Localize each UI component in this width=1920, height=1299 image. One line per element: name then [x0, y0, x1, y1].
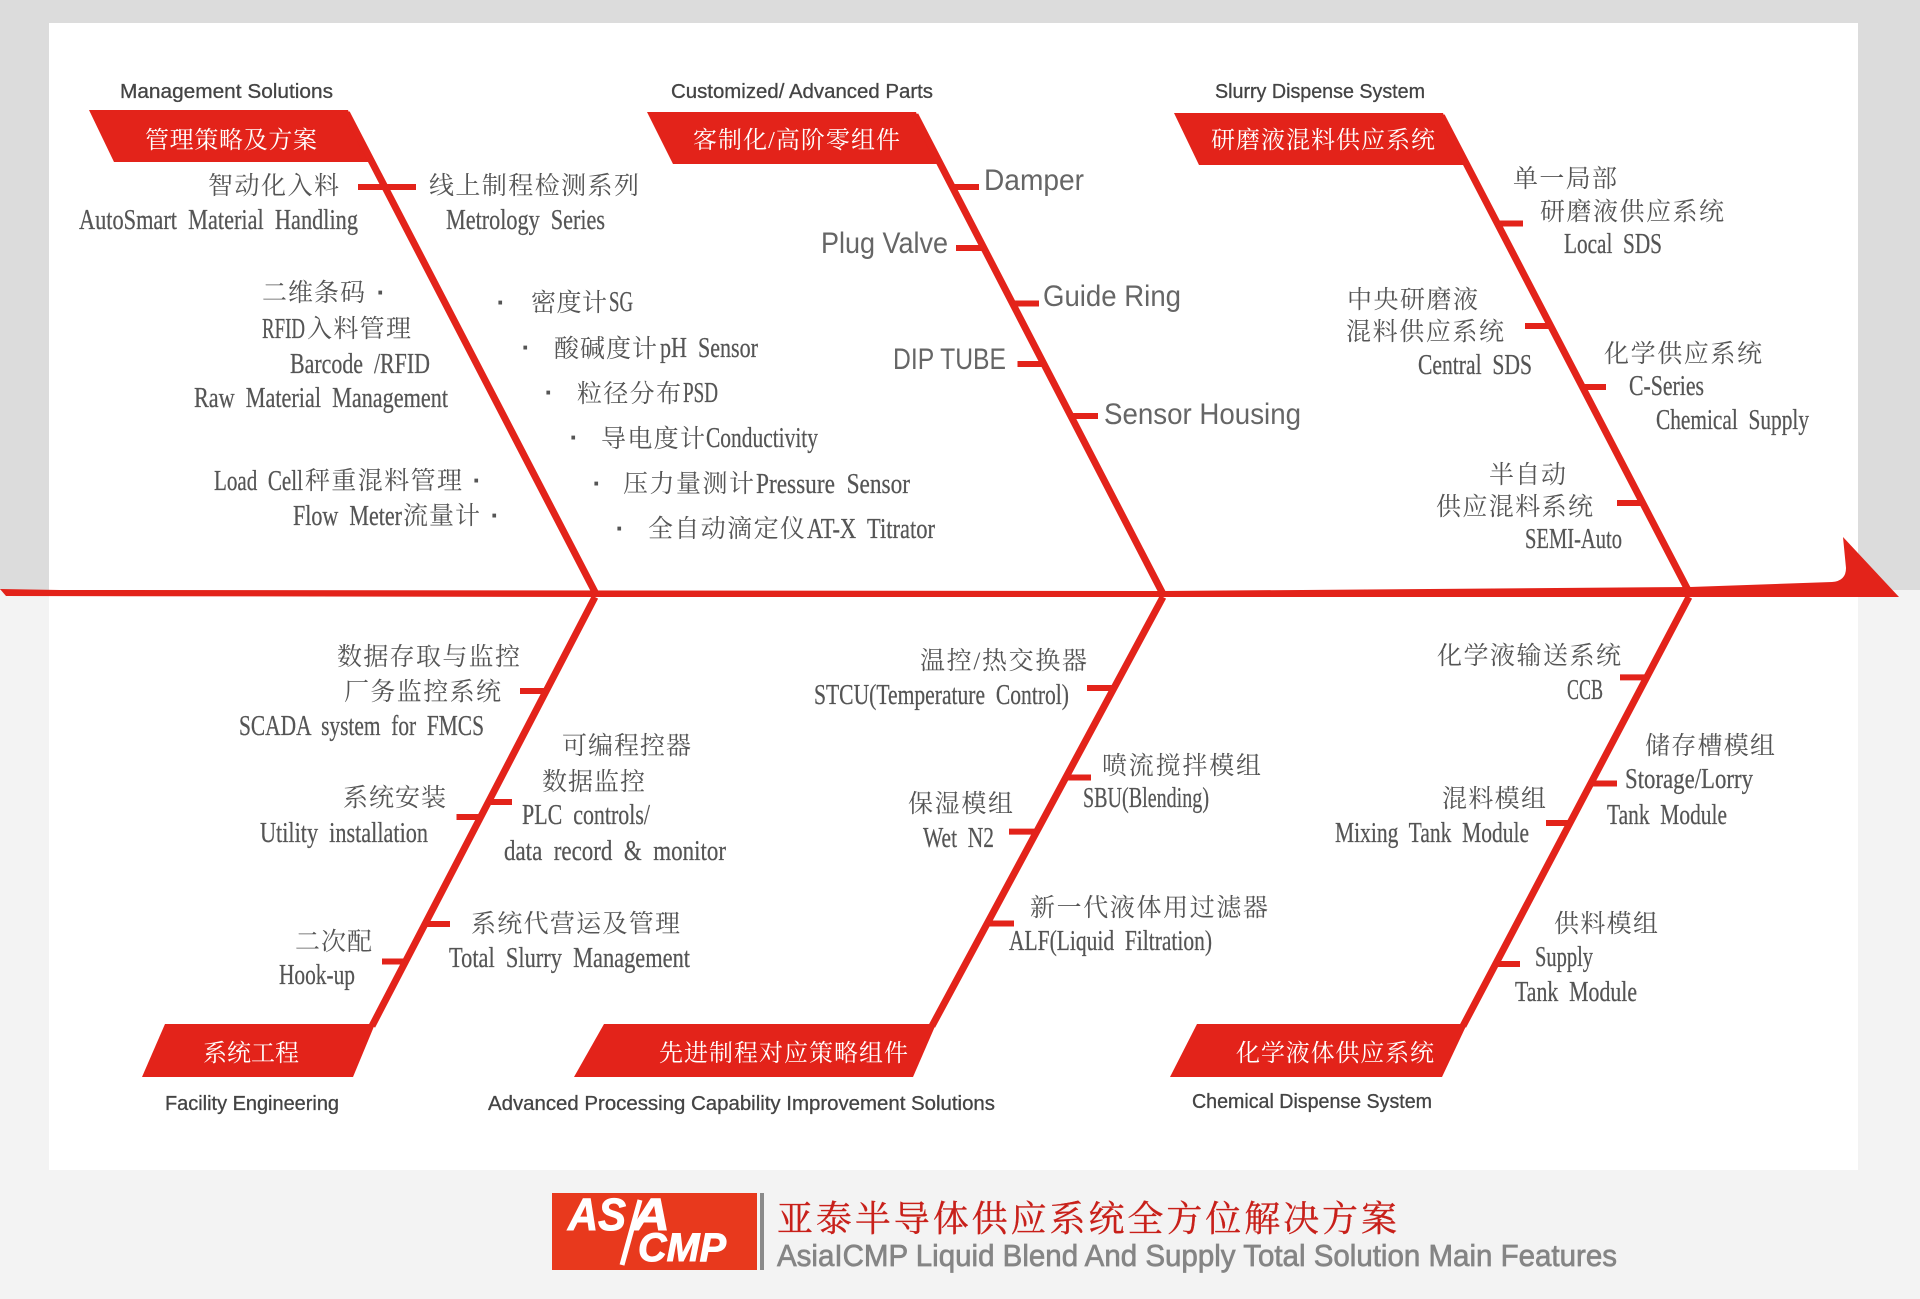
list: metrology sensors: 导电度计	[601, 425, 705, 453]
banner: 客制化/高阶零组件	[647, 112, 937, 164]
item: C-Series Chemical Supply	[1604, 340, 1809, 436]
item: Total Slurry Management	[449, 910, 690, 974]
banner: 先进制程对应策略组件	[574, 1024, 936, 1077]
item: Sensor Housing: Sensor Housing	[1104, 398, 1301, 431]
item: SCADA	[239, 643, 520, 742]
item: PLC controls: 数据监控	[542, 768, 645, 796]
item: Supply Tank Module	[1515, 910, 1658, 1008]
item: Raw Material Management: 入料管理	[307, 315, 411, 343]
panel: chemical dispense system	[1170, 597, 1775, 1113]
item: Supply Tank Module: Tank Module	[1515, 976, 1637, 1008]
branches	[1496, 224, 1641, 503]
item: SBU: SBU(Blending)	[1083, 782, 1209, 814]
heading: Advanced Processing Capability Improvement Solutions: Advanced Processing Capability Improvement Solutions	[488, 1093, 995, 1115]
item: Load Cell and Flow Meter: 秤重混料管理	[305, 467, 462, 495]
item: Load Cell and Flow Meter: ·	[491, 500, 499, 530]
item: Local SDS: 研磨液供应系统	[1540, 198, 1724, 226]
banner: 管理策略及方案	[89, 110, 369, 162]
item: Metrology Series: Metrology Series	[446, 204, 605, 236]
list: metrology sensors: Pressure Sensor	[756, 468, 910, 500]
item: Central SDS: 混料供应系统	[1346, 318, 1504, 346]
item: PLC controls: data record & monitor	[504, 835, 726, 867]
item: Load Cell and Flow Meter: Load Cell	[214, 465, 303, 497]
item: Damper: Damper	[984, 164, 1084, 197]
item: Utility installation	[260, 784, 446, 849]
list: metrology sensors: 酸碱度计	[554, 335, 657, 363]
item: Hook-up: 二次配	[295, 928, 372, 956]
item: SBU: 喷流搅拌模组	[1102, 752, 1261, 780]
item: DIP TUBE: DIP TUBE	[893, 343, 1006, 376]
item: Raw Material Management: Raw Material Management	[194, 382, 448, 414]
item: Load Cell and Flow Meter: ·	[473, 465, 481, 495]
item: STCU: STCU(Temperature Control)	[814, 679, 1069, 711]
item: AutoSmart: 智动化入料	[208, 172, 339, 200]
item: SEMI-Auto: 半自动	[1489, 461, 1566, 489]
item: Supply Tank Module: Supply	[1535, 941, 1593, 973]
branches	[358, 184, 416, 190]
item: ALF	[1009, 894, 1268, 957]
list: metrology sensors: 全自动滴定仪	[648, 515, 805, 543]
item: Central SDS	[1346, 286, 1532, 381]
item: Mixing Tank Module: Mixing Tank Module	[1335, 817, 1529, 849]
list: metrology sensors: Conductivity	[706, 422, 818, 454]
item: Central SDS: Central SDS	[1418, 349, 1532, 381]
item: SCADA: SCADA system for FMCS	[239, 710, 484, 742]
item: SEMI-Auto: 供应混料系统	[1436, 493, 1593, 521]
item: C-Series Chemical Supply: Chemical Supply	[1656, 404, 1809, 436]
item: Metrology Series	[429, 172, 639, 236]
banner text: 化学液体供应系统	[1236, 1040, 1434, 1067]
item: SCADA: 厂务监控系统	[344, 678, 501, 706]
heading: Customized/ Advanced Parts: Customized/ Advanced Parts	[671, 81, 933, 103]
item: Central SDS: 中央研磨液	[1347, 286, 1478, 314]
item: Local SDS: Local SDS	[1564, 228, 1662, 260]
item: SCADA: 数据存取与监控	[337, 643, 520, 671]
list: metrology sensors: AT-X Titrator	[807, 513, 935, 545]
logo: AsiaICMP: AS	[567, 1189, 626, 1240]
list: metrology sensors: pH Sensor	[660, 332, 758, 364]
panel: facility engineering	[142, 597, 726, 1115]
item: PLC controls	[504, 732, 726, 867]
list: metrology sensors: ·	[616, 513, 624, 543]
item: Raw Material Management: 二维条码	[262, 279, 365, 307]
item: SEMI-Auto: SEMI-Auto	[1525, 523, 1622, 555]
item: Storage/Lorry Tank Module: Tank Module	[1607, 799, 1727, 831]
item: Hook-up	[279, 928, 372, 991]
list: metrology sensors: SG	[609, 286, 633, 318]
item: Plug Valve: Plug Valve	[821, 227, 948, 260]
branches	[382, 691, 546, 962]
item: Local SDS: 单一局部	[1513, 165, 1617, 193]
item: SEMI-Auto	[1436, 461, 1622, 555]
item: CCB	[1437, 642, 1621, 706]
banner text: 先进制程对应策略组件	[659, 1040, 908, 1067]
item: Storage/Lorry Tank Module: Storage/Lorry	[1625, 763, 1753, 795]
banner: 化学液体供应系统	[1170, 1024, 1467, 1077]
item: Wet N2	[908, 790, 1013, 854]
list: metrology sensors: 密度计	[531, 289, 607, 317]
item: PLC controls: 可编程控器	[562, 732, 691, 760]
item: SBU	[1083, 752, 1261, 814]
list: metrology sensors: 粒径分布	[577, 380, 681, 408]
item: C-Series Chemical Supply: 化学供应系统	[1604, 340, 1762, 368]
list: metrology sensors: ·	[497, 287, 505, 317]
list: metrology sensors: 压力量测计	[623, 470, 754, 498]
branches	[952, 187, 1098, 416]
spine	[1463, 597, 1689, 1026]
item: STCU	[814, 647, 1087, 711]
logo: AsiaICMP	[552, 1189, 764, 1270]
item: STCU: 温控/热交换器	[920, 647, 1087, 675]
list: metrology sensors: ·	[593, 468, 601, 498]
item: CCB: CCB	[1567, 674, 1603, 706]
item: Mixing Tank Module: 混料模组	[1442, 785, 1546, 813]
title: Chinese: 亚泰半导体供应系统全方位解决方案	[777, 1199, 1397, 1239]
list: metrology sensors: ·	[545, 377, 553, 407]
item: Utility installation: 系统安装	[343, 784, 446, 812]
item: Storage/Lorry Tank Module	[1607, 732, 1775, 831]
item: PLC controls: PLC controls/	[522, 799, 651, 831]
main spine arrow	[0, 537, 1899, 597]
item: Wet N2: 保湿模组	[908, 790, 1013, 818]
list: metrology sensors	[497, 286, 935, 545]
heading: Facility Engineering: Facility Engineering	[165, 1093, 339, 1115]
item: Metrology Series: 线上制程检测系列	[429, 172, 639, 200]
heading: Slurry Dispense System: Slurry Dispense System	[1215, 81, 1425, 103]
item: AutoSmart	[79, 172, 358, 236]
item: Supply Tank Module: 供料模组	[1554, 910, 1658, 938]
item: Wet N2: Wet N2	[923, 822, 994, 854]
heading: Management Solutions: Management Solutions	[120, 81, 333, 103]
list: metrology sensors: ·	[570, 422, 578, 452]
spine	[346, 113, 596, 594]
item: Mixing Tank Module	[1335, 785, 1546, 849]
list: metrology sensors: ·	[522, 332, 530, 362]
item: Raw Material Management: ·	[377, 277, 385, 307]
item: C-Series Chemical Supply: C-Series	[1629, 370, 1704, 402]
banner text: 客制化/高阶零组件	[693, 127, 900, 154]
item: Raw Material Management: RFID	[262, 313, 305, 345]
item: Total Slurry Management: 系统代营运及管理	[471, 910, 680, 938]
logo: AsiaICMP: CMP	[638, 1226, 726, 1270]
panel: advanced processing capability	[488, 597, 1268, 1115]
banner text: 研磨液混料供应系统	[1211, 127, 1435, 154]
panel: management solutions	[79, 81, 935, 594]
item: Raw Material Management	[194, 277, 448, 414]
item: ALF: ALF(Liquid Filtration)	[1009, 925, 1212, 957]
logo: AsiaICMP: A	[631, 1189, 670, 1240]
item: Local SDS	[1513, 165, 1724, 260]
branches	[988, 688, 1113, 924]
branches	[1497, 677, 1646, 964]
item: Load Cell and Flow Meter: Flow Meter	[293, 500, 402, 532]
item: ALF: 新一代液体用过滤器	[1030, 894, 1268, 922]
item: Guide Ring: Guide Ring	[1043, 280, 1181, 313]
banner text: 管理策略及方案	[145, 127, 317, 154]
item: CCB: 化学液输送系统	[1437, 642, 1621, 670]
banner text: 系统工程	[203, 1040, 299, 1067]
title: English: AsiaICMP Liquid Blend And Supply Total Solution Main Features	[777, 1238, 1617, 1273]
panel: customized advanced parts	[647, 81, 1301, 594]
spine	[932, 597, 1163, 1026]
spine	[372, 597, 595, 1026]
item: Load Cell and Flow Meter	[214, 465, 499, 532]
list: metrology sensors: PSD	[683, 377, 718, 409]
item: Load Cell and Flow Meter: 流量计	[403, 502, 480, 530]
heading: Chemical Dispense System: Chemical Dispense System	[1192, 1091, 1432, 1113]
item: AutoSmart: AutoSmart Material Handling	[79, 204, 358, 236]
banner: 研磨液混料供应系统	[1174, 113, 1464, 165]
banner: 系统工程	[142, 1024, 375, 1077]
item: Hook-up: Hook-up	[279, 959, 355, 991]
item: Utility installation: Utility installation	[260, 817, 428, 849]
spine	[915, 115, 1163, 594]
item: Raw Material Management: Barcode /RFID	[290, 348, 430, 380]
panel: slurry dispense system	[1174, 81, 1809, 592]
spine	[1442, 116, 1689, 592]
item: Total Slurry Management: Total Slurry Management	[449, 942, 690, 974]
item: Storage/Lorry Tank Module: 储存槽模组	[1645, 732, 1775, 760]
